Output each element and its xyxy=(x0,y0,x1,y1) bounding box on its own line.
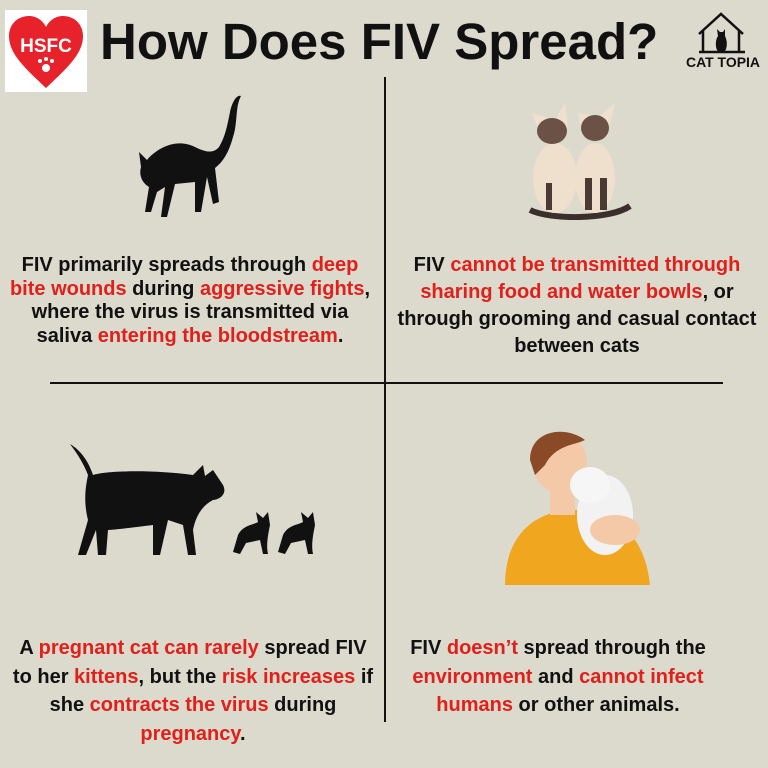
text: cannot be transmitted: FIV cannot be transmitted through xyxy=(414,254,740,276)
text: pregnant cat: pregnancy. xyxy=(140,722,246,744)
text: cannot be transmitted: between cats xyxy=(514,335,640,357)
text: bite wounds xyxy=(10,254,370,346)
text: cannot be transmitted: through grooming and casual contact xyxy=(398,308,756,330)
title: How Does FIV Spread? xyxy=(100,13,658,70)
logo: HSFC xyxy=(5,10,87,92)
divider vertical xyxy=(384,77,386,722)
text: bite wounds: where the virus is transmitted via xyxy=(32,301,348,323)
icon: person hugging cat xyxy=(505,432,650,585)
text: environment: humans or other animals. xyxy=(436,694,680,716)
text: cannot be transmitted xyxy=(398,254,756,357)
logo: HSFC: HSFC xyxy=(20,36,72,57)
text: pregnant cat: A pregnant cat can rarely spread FIV xyxy=(19,637,367,659)
text: pregnant cat xyxy=(13,637,374,744)
text: environment: FIV doesn’t spread through the xyxy=(410,637,706,659)
text: environment xyxy=(410,637,706,716)
text: bite wounds: FIV primarily spreads through deep xyxy=(22,254,358,276)
icon: mother cat with kittens xyxy=(70,444,315,555)
logo: Cat Topia: CAT TOPIA xyxy=(686,54,760,70)
icon: arched cat xyxy=(139,96,241,217)
text: pregnant cat: she contracts the virus during xyxy=(50,694,336,716)
text: environment: environment and cannot infect xyxy=(412,666,704,688)
text: bite wounds: bite wounds during aggressive fights, xyxy=(10,278,370,300)
logo: Cat Topia xyxy=(686,12,760,70)
icon: two siamese cats xyxy=(528,104,632,220)
text: pregnant cat: to her kittens, but the risk increases if xyxy=(13,666,373,688)
text: cannot be transmitted: sharing food and water bowls, or xyxy=(420,281,734,303)
divider horizontal xyxy=(50,382,723,384)
text: bite wounds: saliva entering the bloodstream. xyxy=(37,324,343,346)
